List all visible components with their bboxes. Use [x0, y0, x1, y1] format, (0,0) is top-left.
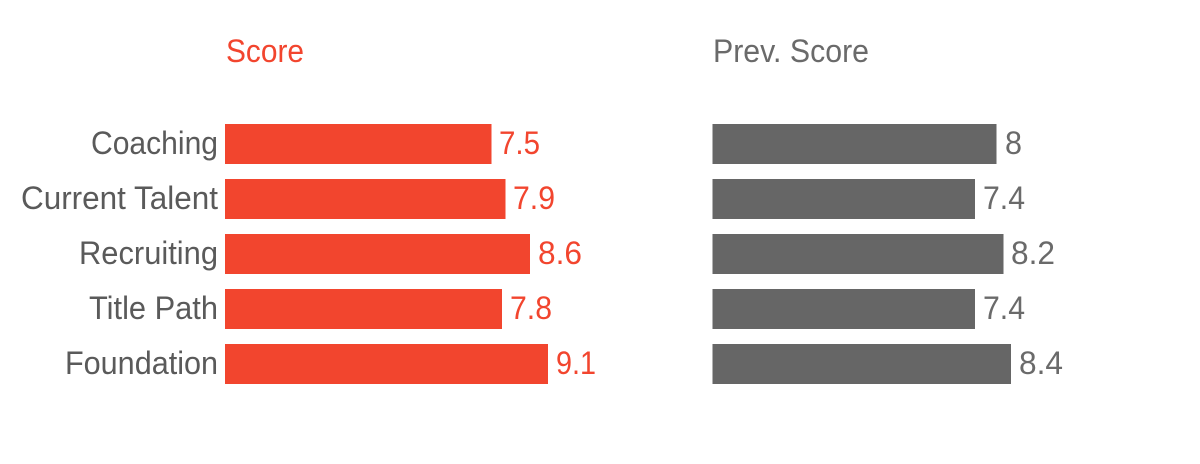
- values: Score: [499, 125, 596, 381]
- values: Score: 7.5: [499, 125, 540, 161]
- category labels: Recruiting: [79, 235, 218, 271]
- values: Prev. Score: 8.2: [1011, 235, 1055, 271]
- bar chart: Prev. Score: [712, 124, 1011, 384]
- values: Prev. Score: 7.4: [983, 180, 1025, 216]
- values: Score: 8.6: [538, 235, 582, 271]
- values: Prev. Score: 7.4: [983, 290, 1025, 326]
- values: Prev. Score: [983, 125, 1063, 381]
- values: Score: 9.1: [556, 345, 596, 381]
- heading: Prev. Score: Prev. Score: [713, 33, 869, 69]
- values: Prev. Score: 8: [1005, 125, 1022, 161]
- category labels: [21, 125, 218, 381]
- values: Prev. Score: 8.4: [1019, 345, 1063, 381]
- heading: Score: Score: [226, 33, 304, 69]
- category labels: Coaching: [91, 125, 218, 161]
- values: Score: 7.9: [513, 180, 555, 216]
- values: Score: 7.8: [510, 290, 552, 326]
- category labels: Title Path: [89, 290, 218, 326]
- bar chart: Score: [225, 124, 548, 384]
- category labels: Foundation: [65, 345, 218, 381]
- category labels: Current Talent: [21, 180, 218, 216]
